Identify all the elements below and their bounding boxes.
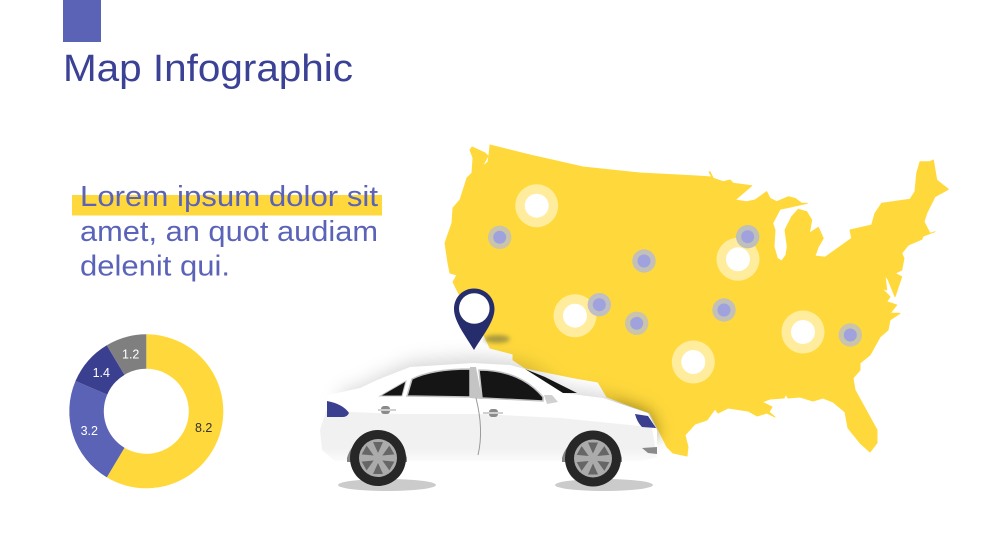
value labels: 3.2: [81, 424, 98, 438]
city markers: white: [515, 184, 824, 384]
ground shadows: [338, 479, 436, 491]
value labels: 1.2: [122, 348, 139, 362]
front wheel: [562, 430, 622, 486]
windshield: [525, 369, 577, 393]
value labels: [81, 348, 212, 438]
mirror: [544, 395, 558, 404]
door pillar: [470, 367, 482, 399]
rear quarter window: [380, 381, 406, 396]
rear window: [407, 369, 470, 397]
title: Map Infographic: [63, 48, 353, 90]
text block: description with highlight: Lorem ipsum dolor sit: [80, 181, 378, 213]
tail light: [327, 401, 349, 417]
text block: description with highlight: amet, an quot audiam: [80, 216, 378, 248]
USA map: [445, 145, 948, 456]
front window: [479, 370, 543, 401]
segment 1.2: [107, 334, 146, 375]
pin shadow: [484, 335, 510, 343]
front shadow on map: [610, 398, 662, 440]
city markers: purple: [488, 225, 862, 347]
car body: [320, 363, 657, 460]
donut chart: [69, 334, 223, 488]
text block: description with highlight: [72, 181, 382, 282]
text block: description with highlight: delenit qui.: [80, 250, 230, 282]
accent tab: [63, 0, 101, 42]
segment 3.2: [69, 381, 124, 477]
head light: [635, 414, 656, 428]
segment 8.2: [107, 334, 223, 488]
door handles: [378, 406, 503, 417]
value labels: 8.2: [195, 421, 212, 435]
value labels: 1.4: [93, 366, 110, 380]
car shadow: [340, 357, 660, 436]
lower body shade: [320, 411, 657, 461]
car: [320, 357, 662, 491]
rear wheel: [347, 430, 407, 486]
fog light: [642, 447, 657, 454]
location pin: [454, 288, 494, 350]
segment 1.4: [75, 345, 124, 395]
door line: [476, 398, 481, 455]
